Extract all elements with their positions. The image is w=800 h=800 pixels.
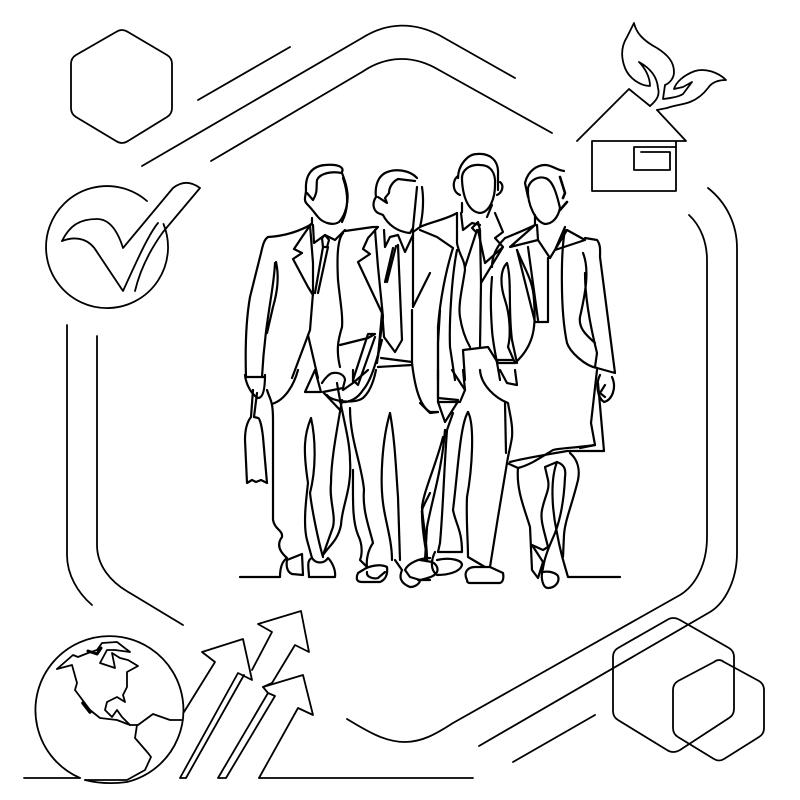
- icon: hexagon top left: [71, 30, 172, 143]
- ground lines: [24, 777, 473, 779]
- figure: woman: [480, 165, 620, 588]
- icon: growth arrows: [180, 611, 313, 778]
- hexagonal frame lines: [67, 26, 737, 762]
- icon: globe: [35, 636, 183, 783]
- figure: man two with book: [305, 170, 458, 587]
- figure: man one: [240, 165, 350, 577]
- icon: check mark in circle: [46, 183, 200, 308]
- figure: man three: [420, 154, 503, 583]
- illustration: business team: [240, 154, 620, 588]
- icon: house with sprouting leaves: [577, 23, 726, 191]
- icon: overlapping hexagons bottom right: [613, 618, 764, 760]
